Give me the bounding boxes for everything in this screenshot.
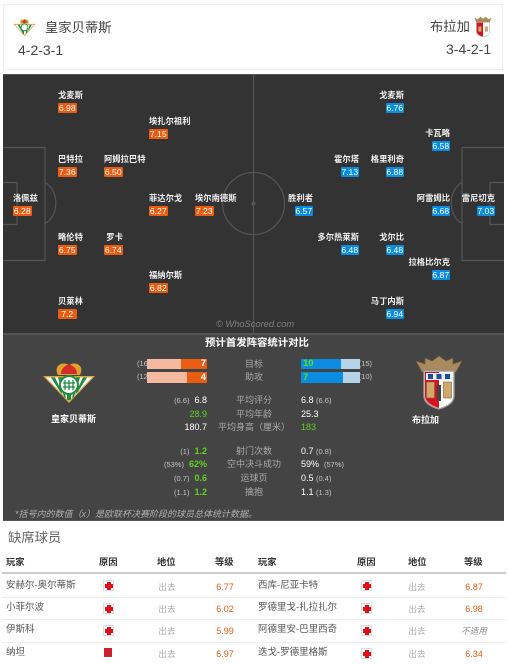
heading: missing players: 缺席球员 [8,530,61,545]
table: missing players: 不适用 [461,626,487,636]
header rule [2,572,506,574]
player: 卡瓦略 [425,128,450,151]
player: 埃尔南德斯: 埃尔南德斯 [195,193,236,203]
table: missing players: 出去 [158,582,176,592]
player: 霍尔塔 [334,154,359,177]
value right: 25.3 [301,409,319,419]
player: 戈麦斯: 6.98 [59,103,76,113]
icon: Real Betis small crest [13,19,36,36]
label: 运球页 [240,473,268,483]
stat: average height [184,422,316,432]
player: 雷尼切克: 7.03 [477,206,494,216]
row right 3: 阿德里安-巴里西奇 [258,624,337,635]
right bar: 10 [303,358,314,369]
team header: Real Betis [13,19,111,58]
table: missing players: 出去 [408,604,426,614]
values right: 0.5 (0.4) [301,473,331,483]
player: 阿姆拉巴特: 阿姆拉巴特 [104,154,146,164]
context value left: (12) [137,372,150,381]
player: 罗卡 [104,232,123,255]
player: 阿雷姆比 [417,193,450,216]
player: 菲达尔戈: 菲达尔戈 [149,193,182,203]
label: 射门次数 [236,446,272,456]
team name: 布拉加 [430,19,470,34]
table: missing players: 等级 [215,557,234,567]
value left: 28.9 [189,409,207,419]
table: missing players: 6.87 [465,582,483,592]
label: 目标 [245,359,263,369]
label: 空中决斗成功 [227,459,281,469]
player: 拉格比尔克: 6.87 [432,270,449,280]
player: 多尔热莱斯: 多尔热莱斯 [318,232,359,242]
player: 马丁内斯 [371,296,404,319]
player: 雷尼切克: 雷尼切克 [462,193,495,203]
player: 埃扎尔祖利: 7.15 [150,129,167,139]
table: missing players: 地位 [408,557,427,567]
player: 拉格比尔克: 拉格比尔克 [408,257,450,267]
left bar: 4 [201,372,206,383]
player: 马丁内斯: 马丁内斯 [371,296,404,306]
row right 4: 迭戈-罗德里格斯 [258,647,328,658]
values left: (0.7) 0.6 [174,473,207,483]
player: 卡瓦略: 6.58 [432,141,449,151]
bar row: goals [137,358,372,369]
player: 埃扎尔祖利: 埃扎尔祖利 [149,116,190,126]
player: 福纳尔斯: 6.82 [150,283,167,293]
left bar [147,359,207,369]
formation: 4-2-3-1 [18,42,63,58]
player: 戈麦斯 (Braga): 6.76 [386,103,403,113]
left bar [147,372,207,383]
stat: dribbles [0,472,508,484]
icon: Braga crest [416,356,462,410]
team header: Braga [430,16,492,57]
player: 胜利者: 6.57 [295,206,312,216]
row left 4: 纳坦 [6,647,25,658]
stat: average rating [174,395,331,405]
label: 平均身高（厘米） [218,422,290,432]
formation: 3-4-2-1 [446,41,491,57]
pitch markings [3,75,504,333]
player: 多尔热莱斯 [318,232,359,255]
table: missing players [0,552,508,664]
table: missing players: 等级 [464,557,483,567]
row right 2: 罗德里戈-扎拉扎尔 [258,602,337,613]
row left 2: 小菲尔波 [6,602,44,613]
table: missing players: 地位 [157,557,176,567]
right bar [301,359,360,369]
player: 戈麦斯 (Braga): 戈麦斯 [379,90,404,100]
table: missing players: 6.98 [465,604,483,614]
stat: tackles [0,486,508,498]
values left: (6.6) 6.8 [174,395,207,405]
player: 胜利者: 胜利者 [288,193,313,203]
left bar: 7 [201,358,206,369]
player: 贝莱林: 7.2 [61,309,73,319]
player: 阿姆拉巴特 [104,154,146,177]
player: 巴特拉: 7.36 [59,167,76,177]
table: missing players: 5.99 [216,626,234,636]
table: missing players: 原因 [357,557,376,567]
values right: 0.7 (0.8) [301,446,331,456]
player: 福纳尔斯: 福纳尔斯 [149,270,182,280]
player: 阿姆拉巴特: 6.50 [105,167,122,177]
stats heading: 预计首发阵容统计对比 [205,338,309,349]
table: missing players: 出去 [158,604,176,614]
row left 1: 安赫尔-奥尔蒂斯 [6,580,76,591]
player: 洛佩兹 [13,193,38,216]
player: 戈尔比 [379,232,404,255]
player: 罗卡: 罗卡 [106,232,123,242]
right bar: 7 [303,372,308,383]
right bar [301,372,360,383]
player: 贝莱林: 贝莱林 [58,296,83,306]
values left: (1) 1.2 [180,446,207,456]
player: 戈尔比: 6.48 [386,245,403,255]
player: 霍尔塔: 7.13 [341,167,358,177]
header: right team: 玩家 [258,557,277,567]
bar row: assists [137,372,372,383]
values right: 59% (57%) [301,459,344,469]
player: 格里利奇: 格里利奇 [371,154,404,164]
player: 格里利奇 [370,154,404,177]
context value right: (15) [359,359,372,368]
table: missing players: 出去 [408,582,426,592]
table: missing players: 6.34 [465,649,483,659]
label: 平均评分 [236,395,272,405]
team label: Braga: 布拉加 [412,415,439,425]
player: 卡瓦略: 卡瓦略 [425,128,450,138]
player: 多尔热莱斯: 6.48 [341,245,358,255]
context value right: (10) [359,372,372,381]
team label: Real Betis: 皇家贝蒂斯 [51,414,96,424]
player: 洛佩兹: 6.28 [14,206,31,216]
player: 菲达尔戈: 6.27 [150,206,167,216]
values left: (53%) 62% [164,459,207,469]
team name: 皇家贝蒂斯 [45,20,111,35]
player: 略伦特 [58,232,83,255]
stat: average age [189,409,319,419]
table: missing players: 出去 [408,626,426,636]
panel: stats comparison background [3,333,504,521]
player: 埃扎尔祖利 [149,116,190,139]
header: left team: 玩家 [6,557,25,567]
player: 巴特拉: 巴特拉 [58,154,83,164]
player: 阿雷姆比: 6.68 [432,206,449,216]
player: 胜利者 [288,193,313,216]
player: 福纳尔斯 [149,270,182,293]
player: 阿雷姆比: 阿雷姆比 [417,193,450,203]
panel: pitch with lineups [3,74,504,333]
table: missing players: 6.02 [216,604,234,614]
table: missing players: 原因 [99,557,118,567]
table: missing players: 出去 [408,649,426,659]
context value left: (16) [137,359,150,368]
table: missing players: 出去 [158,626,176,636]
value right: 183 [301,422,316,432]
table: missing players: 6.97 [216,649,234,659]
player: 雷尼切克 [462,193,495,216]
footnote: *括号内的数值（x）是欧联杯决赛阶段的球员总体统计数据。 [15,509,257,519]
player: 戈尔比: 戈尔比 [379,232,404,242]
values left: (1.1) 1.2 [174,487,207,497]
values right: 1.1 (1.3) [301,487,331,497]
player: 拉格比尔克 [408,257,450,280]
row left 3: 伊斯科 [6,624,35,635]
player: 马丁内斯: 6.94 [386,309,403,319]
row right 1: 西库-尼亚卡特 [258,580,318,591]
table: missing players: 出去 [158,649,176,659]
stat: shots [180,446,331,456]
player: 洛佩兹: 洛佩兹 [13,193,38,203]
header card [3,4,503,70]
player: 贝莱林 [58,296,83,319]
table: missing players: 6.77 [216,582,234,592]
player: 埃尔南德斯 [195,193,236,216]
player: 略伦特: 6.75 [59,245,76,255]
value left: 180.7 [184,422,207,432]
player: 埃尔南德斯: 7.23 [196,206,213,216]
player: 罗卡: 6.74 [105,245,122,255]
player: 霍尔塔: 霍尔塔 [334,154,359,164]
watermark: © WhoScored.com [216,319,294,329]
player: 戈麦斯 (Braga) [379,90,404,113]
player: 菲达尔戈 [149,193,182,216]
player: 巴特拉 [58,154,83,177]
label: 平均年龄 [236,409,272,419]
player: 戈麦斯 [58,90,83,113]
label: 擒抱 [245,487,263,497]
label: 助攻 [245,372,263,382]
player: 略伦特: 略伦特 [58,232,83,242]
icon: Real Betis crest [43,364,95,403]
values right: 6.8 (6.6) [301,395,331,405]
player: 格里利奇: 6.88 [386,167,403,177]
icon: Braga small crest [474,16,492,38]
stat: aerial duels [164,459,344,469]
player: 戈麦斯: 戈麦斯 [58,90,83,100]
